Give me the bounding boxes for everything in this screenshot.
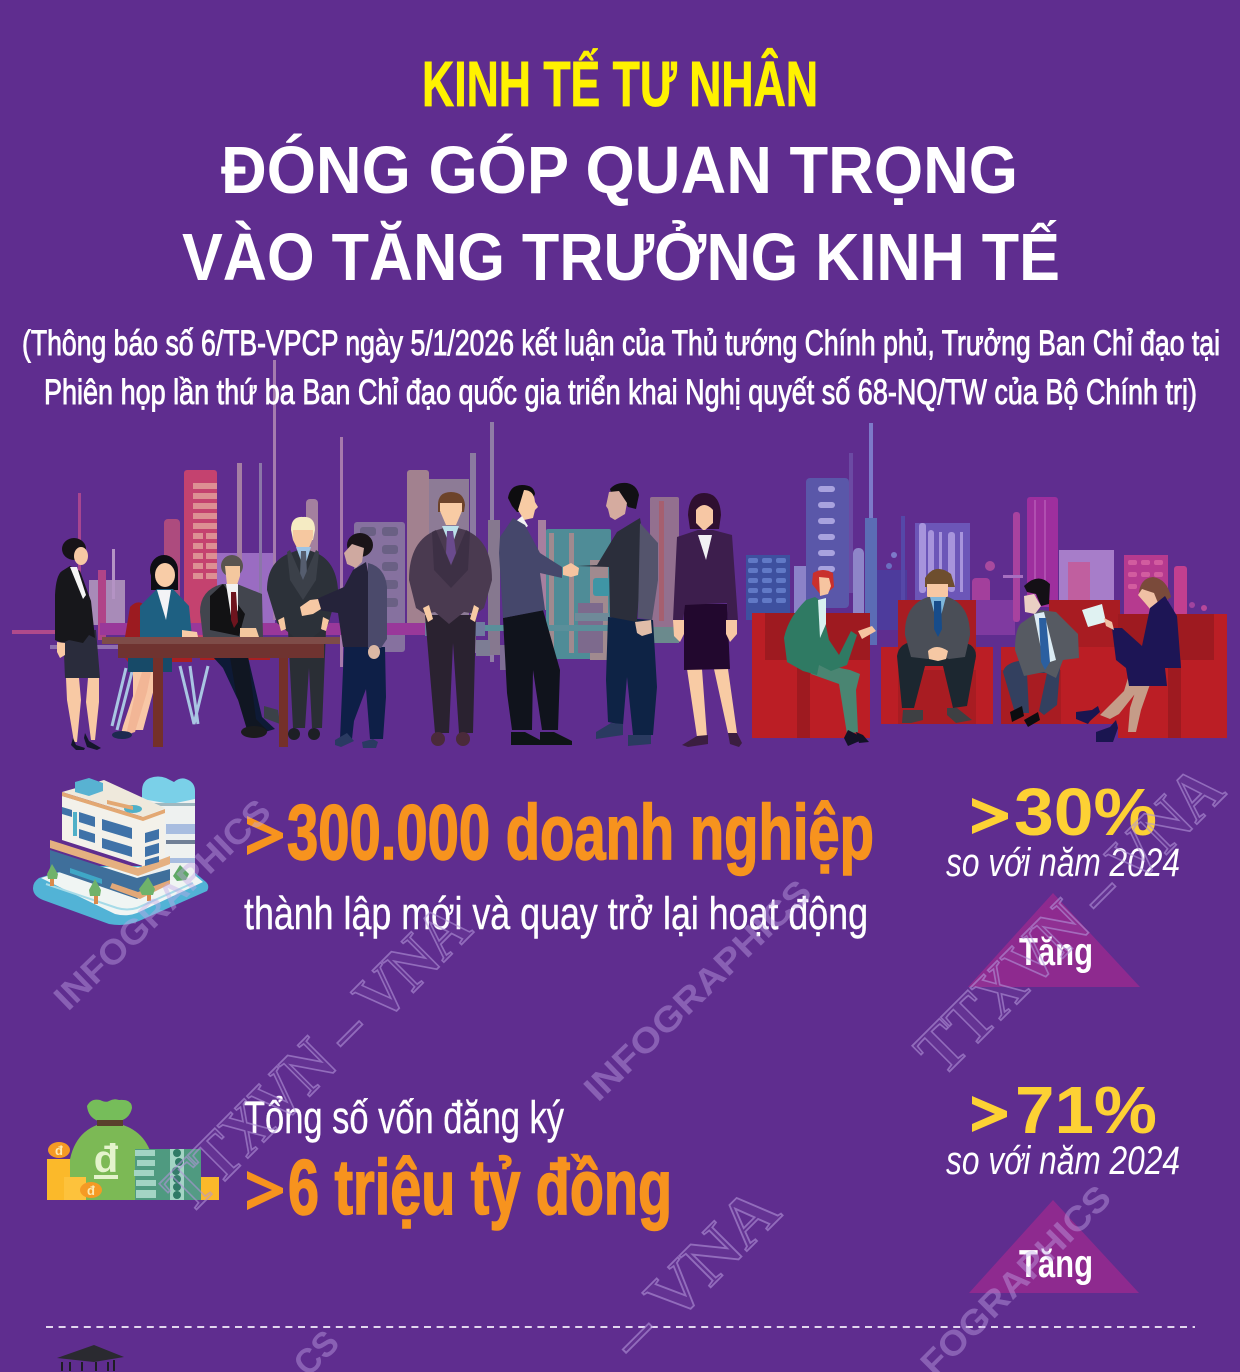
man seated centre	[897, 569, 976, 723]
watermarks: – VNA	[592, 1172, 794, 1372]
man with hands in pockets	[409, 492, 492, 746]
illustration: city skyline	[12, 360, 1207, 670]
man with hand extended	[300, 533, 387, 748]
stat 2 comparison: so với năm 2024	[946, 1139, 1180, 1183]
woman in green suit	[784, 570, 876, 746]
stat 2 description: Tổng số vốn đăng ký	[244, 1092, 564, 1143]
coins	[47, 1159, 70, 1200]
bag	[68, 1125, 155, 1200]
stat 1 headline: 300.000 doanh nghiệp	[287, 788, 874, 876]
title: Kinh tế tư nhân: KINH TẾ TƯ NHÂN	[422, 47, 818, 120]
sofa 2	[881, 600, 993, 724]
stat 2 increase triangle	[969, 1200, 1139, 1293]
watermarks: INFOGRAPHICS	[576, 872, 819, 1109]
sofa 4	[1118, 614, 1227, 738]
man thinking	[1003, 578, 1079, 727]
woman standing right	[673, 493, 742, 747]
old man standing	[267, 517, 338, 740]
woman reading	[1076, 577, 1181, 742]
table	[102, 637, 340, 747]
trees	[47, 864, 58, 879]
red chair behind woman	[125, 602, 144, 639]
watermarks	[46, 751, 1238, 1372]
sofa 1	[752, 613, 870, 738]
stat 2 increase triangle: Tăng	[1019, 1243, 1093, 1286]
handshake right man	[577, 483, 658, 746]
lower floor	[50, 850, 170, 899]
stat 1 percent: 30%	[1014, 775, 1157, 850]
building base plate	[33, 866, 208, 925]
stat 1 increase triangle: Tăng	[1019, 931, 1093, 974]
handshake left man	[499, 485, 579, 745]
stat 1 increase triangle	[968, 893, 1140, 987]
stat 1 headline	[247, 788, 874, 876]
icon: money bag with coins and cash: đ	[94, 1137, 119, 1181]
icon: office building	[33, 776, 208, 925]
stat 1 description: thành lập mới và quay trở lại hoạt động	[244, 888, 868, 939]
seated man	[200, 555, 280, 738]
heading line 1: ĐÓNG GÓP QUAN TRỌNG	[221, 133, 1018, 208]
subtitle	[22, 324, 1220, 412]
woman standing left	[55, 538, 101, 750]
icon: money bag with coins and cash	[47, 1099, 219, 1200]
watermarks: INFOGRAPHICS	[46, 792, 279, 1018]
stat 1 comparison: so với năm 2024	[946, 841, 1180, 885]
cash stack	[135, 1149, 201, 1200]
stat 2 headline: 6 triệu tỷ đồng	[288, 1143, 672, 1231]
upper block	[62, 796, 165, 866]
watermarks: TTXVN – VNA	[147, 889, 485, 1227]
stat 2 headline	[247, 1143, 672, 1231]
heading line 2: VÀO TĂNG TRƯỞNG KINH TẾ	[182, 220, 1060, 295]
illustration: meeting table group	[55, 483, 742, 750]
illustration: sofa group	[752, 569, 1227, 746]
icon: pavilion roof	[57, 1345, 124, 1371]
tower right	[142, 795, 195, 880]
icon: money bag with coins and cash: đ	[55, 1143, 63, 1158]
stat 2 percent: 71%	[1015, 1073, 1157, 1148]
seated woman	[112, 555, 208, 739]
icon: money bag with coins and cash: đ	[87, 1183, 95, 1198]
sofa 3	[1001, 600, 1120, 724]
